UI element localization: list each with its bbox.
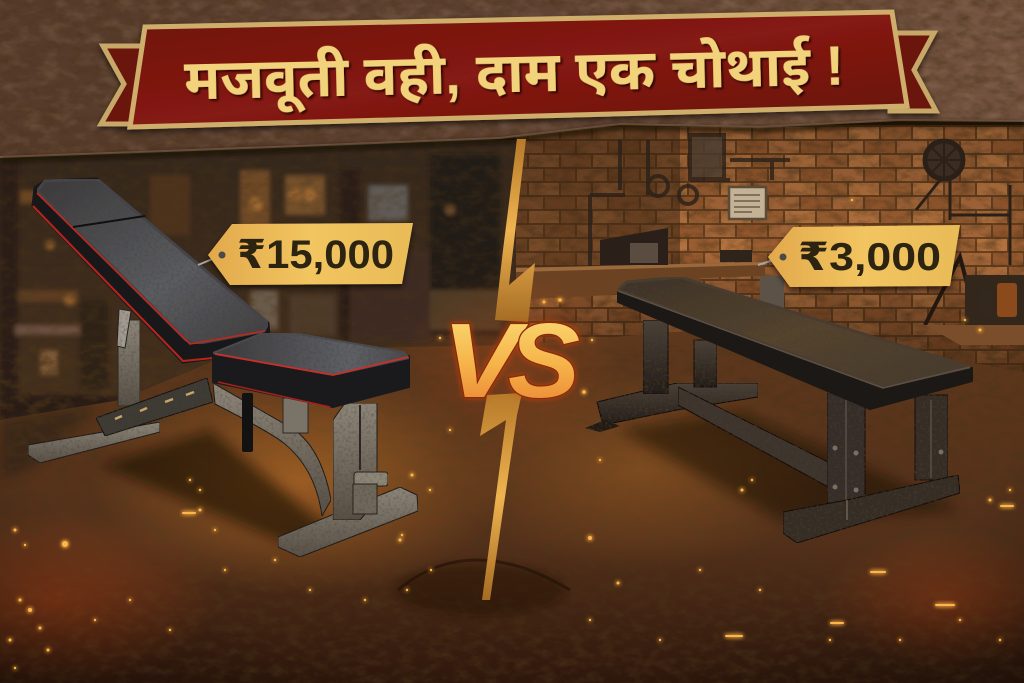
front foot xyxy=(278,487,418,557)
adjustment rail xyxy=(96,378,213,436)
leg rivets xyxy=(832,446,944,518)
front upright xyxy=(333,403,388,520)
banner title: मजवूती वही, दाम एक चोथाई ! xyxy=(183,34,845,115)
rear foot xyxy=(28,422,160,463)
seat post xyxy=(283,398,308,433)
rear support xyxy=(117,309,140,406)
bench left: adjustable premium xyxy=(28,179,418,557)
work shelf with tools xyxy=(516,228,784,308)
wall sign xyxy=(729,187,766,219)
banner xyxy=(101,12,936,127)
price tag right: ₹3,000 xyxy=(798,236,941,279)
backrest pad xyxy=(33,179,269,362)
front foot xyxy=(783,475,960,543)
bench right ground shadow xyxy=(620,410,960,520)
seat pad xyxy=(213,333,409,407)
top stone band xyxy=(0,0,1024,160)
background: left workshop wall xyxy=(0,140,520,440)
sparks xyxy=(8,199,1014,669)
hanging tools xyxy=(590,135,790,280)
wheel on wall xyxy=(916,141,1010,265)
pad xyxy=(618,277,972,409)
banner ribbon left xyxy=(101,46,160,124)
long rail xyxy=(678,387,830,488)
bench left ground shadow xyxy=(100,430,330,545)
banner ribbon right xyxy=(890,33,936,111)
VS text: S xyxy=(508,302,580,420)
price tag left xyxy=(198,223,413,285)
seat pop pin xyxy=(242,393,253,452)
bench right: basic flat xyxy=(585,277,972,543)
price tag right xyxy=(758,225,960,287)
background: right brick wall xyxy=(516,125,1024,385)
VS text xyxy=(442,302,580,420)
center lightning divider xyxy=(480,139,535,600)
VS text: V xyxy=(442,302,529,420)
rear legs xyxy=(643,320,717,394)
front legs xyxy=(827,393,948,503)
price tag left: ₹15,000 xyxy=(237,233,394,277)
banner main xyxy=(130,12,907,127)
main frame arch xyxy=(213,383,331,516)
right workbench xyxy=(925,257,1024,345)
rear foot xyxy=(585,383,758,432)
